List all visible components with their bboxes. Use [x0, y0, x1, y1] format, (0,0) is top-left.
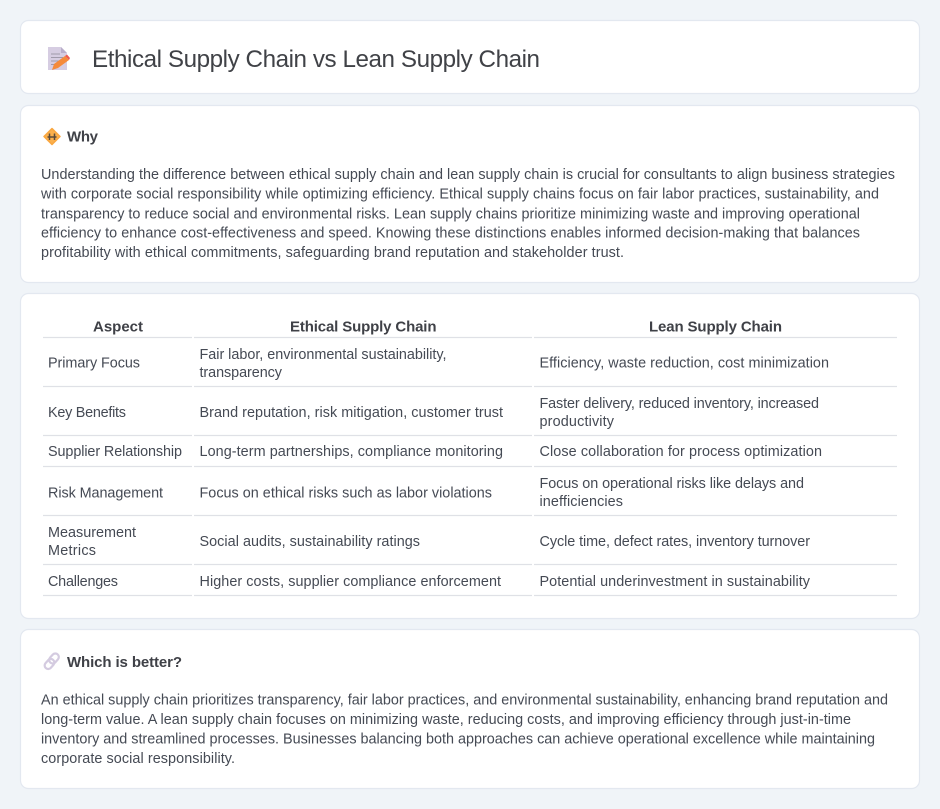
table header row [93, 318, 782, 336]
text block: why body: transparency to reduce social and environmental risks. Lean supply chains prioritize minimizing waste and improving operational [41, 206, 860, 222]
row: risk management: Risk Management [48, 485, 163, 501]
row: supplier relationship: Close collaboration for process optimization [540, 444, 822, 460]
row: supplier relationship: Long-term partnerships, compliance monitoring [200, 444, 503, 460]
text block: why body [40, 167, 895, 261]
heading: why: Why [67, 128, 99, 146]
title: Ethical Supply Chain vs Lean Supply Chain [92, 46, 540, 73]
row: risk management: inefficiencies [540, 494, 623, 510]
panel: which is better [20, 630, 920, 788]
panel: title header [20, 20, 920, 94]
table header row: Lean Supply Chain [649, 318, 782, 336]
row: measurement metrics: Cycle time, defect rates, inventory turnover [540, 534, 810, 550]
row: risk management: Focus on operational risks like delays and [540, 476, 804, 492]
row: challenges: Challenges [48, 574, 118, 590]
row: supplier relationship: Supplier Relationship [48, 444, 182, 460]
text block: which is better body: An ethical supply chain prioritizes transparency, fair labor practices, and environmental sustainability, enhancing brand reputation and [41, 692, 888, 708]
table header row: Aspect [93, 318, 143, 336]
row: key benefits: Brand reputation, risk mitigation, customer trust [200, 405, 503, 421]
icon: document with pencil [48, 47, 70, 70]
row: key benefits [48, 396, 819, 430]
icon: orange diamond sign [44, 128, 60, 144]
icon: chain link [43, 652, 60, 670]
row: primary focus [48, 347, 829, 381]
heading: which is better: Which is better? [67, 654, 182, 671]
row: measurement metrics: Social audits, sustainability ratings [200, 534, 420, 550]
text block: which is better body [41, 692, 888, 767]
row: primary focus: transparency [200, 365, 283, 381]
row: primary focus: Efficiency, waste reduction, cost minimization [540, 356, 829, 372]
panel: comparison table [20, 294, 920, 618]
row: measurement metrics [48, 525, 810, 559]
row: key benefits: Faster delivery, reduced inventory, increased [540, 396, 819, 412]
row: key benefits: Key Benefits [48, 405, 126, 421]
text block: which is better body: long-term value. A lean supply chain focuses on minimizing waste, reducing costs, and improving efficiency through just-in-time [41, 712, 851, 728]
panel: why [20, 106, 920, 282]
row: challenges: Higher costs, supplier compliance enforcement [200, 574, 501, 590]
text block: why body: with corporate social responsibility while optimizing efficiency. Ethical supply chains focus on fair labor practices, sustainability, and [40, 187, 879, 203]
row: primary focus: Primary Focus [48, 356, 140, 372]
row: measurement metrics: Metrics [48, 543, 96, 559]
row: measurement metrics: Measurement [48, 525, 136, 541]
row: primary focus: Fair labor, environmental sustainability, [200, 347, 446, 363]
row: supplier relationship [48, 444, 822, 460]
row: challenges: Potential underinvestment in sustainability [540, 574, 811, 590]
text block: why body: efficiency to enhance cost-effectiveness and speed. Knowing these distinctions enables informed decision-making that balances [41, 226, 860, 242]
table header row: Ethical Supply Chain [290, 318, 436, 336]
row: risk management: Focus on ethical risks such as labor violations [200, 485, 492, 501]
row: challenges [48, 574, 811, 590]
text block: which is better body: inventory and streamlined processes. Businesses balancing both approaches can achieve operational excellence while maintaining [41, 731, 875, 747]
row: risk management [48, 476, 804, 510]
text block: why body: Understanding the difference between ethical supply chain and lean supply chain is crucial for consultants to align business strategies [41, 167, 895, 183]
text block: which is better body: corporate social responsibility. [41, 751, 235, 767]
text block: why body: profitability with ethical commitments, safeguarding brand reputation and stakeholder trust. [41, 245, 624, 261]
row: key benefits: productivity [540, 414, 615, 430]
